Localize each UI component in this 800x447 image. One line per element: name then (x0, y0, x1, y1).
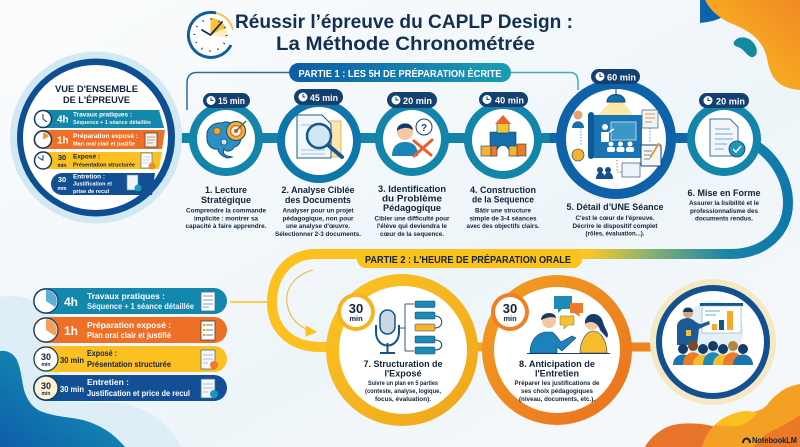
overview heading: DE L'ÉPREUVE (63, 94, 131, 106)
overview row: entretien (51, 173, 155, 195)
left list: préparation exposé: Préparation exposé : (87, 320, 171, 330)
overview row: entretien: Entretion : (73, 174, 105, 180)
title clock icon (188, 12, 233, 57)
icon: person, question and cross: ? (421, 123, 427, 134)
icon: person, question and cross (392, 119, 432, 156)
overview row: préparation exposé: 1h (57, 136, 69, 146)
step 8 text: l'Entretien (535, 368, 579, 380)
time badge 20 min: 20 min (403, 96, 432, 106)
step 1 circle with brain icon (186, 93, 267, 230)
left list: entretien: Entretien : (87, 377, 129, 387)
overview row: travaux pratiques: 4h (57, 114, 69, 126)
step 6 text: documents rendus. (695, 216, 753, 222)
step 6 text (688, 188, 760, 222)
decorative corner shapes: bottom left (0, 296, 181, 447)
step 4 text: de la Sequence (472, 194, 534, 206)
left list: travaux pratiques (33, 288, 227, 314)
badge 30 min: min (503, 314, 517, 323)
title: La Méthode Chronométrée (276, 33, 535, 55)
step 1 text: Stratégique (201, 195, 251, 206)
step 7 circle (326, 274, 478, 426)
step 2 text: une analyse d'œuvre. (286, 223, 350, 230)
badge 30 min: min (349, 314, 363, 323)
icon: two people talking (527, 296, 610, 354)
step 6 text: Assurer la lisibilité et le (689, 200, 759, 207)
left list: préparation exposé (33, 317, 227, 343)
overview row: travaux pratiques: Travaux pratiques : (73, 112, 132, 118)
step 5 text: (rôles, évaluation...). (586, 230, 645, 238)
time badge 45 min (294, 89, 343, 105)
step 4 text: avec des objectifs clairs. (466, 223, 540, 230)
step 3 text: du Problème (382, 194, 442, 204)
step 3 text: l'élève qui deviendra le (377, 223, 447, 230)
step 2 text: Sélectionner 2-3 documents. (275, 231, 361, 238)
badge 30 min (337, 293, 375, 331)
step 5 text: C'est le cœur de l'épreuve. (576, 215, 655, 222)
title (235, 11, 573, 55)
overview row: entretien: Justification et (73, 182, 112, 188)
overview row: préparation exposé: Man oral clair et justifie (73, 142, 135, 148)
step 7 text: focus, évaluation). (375, 396, 431, 403)
final circle with presenter (650, 279, 776, 405)
overview heading: VUE D'ENSEMBLE (55, 84, 139, 95)
step 1 text: Comprendre la commande (186, 208, 266, 214)
step 8 text: (niveau, documents, etc.). (519, 396, 595, 403)
step 2 text: des Documents (285, 195, 351, 206)
step 8 text: 8. Anticipation de (519, 359, 595, 370)
overview row: travaux pratiques: Séquence + 1 séance détaillée (73, 120, 151, 126)
step 7 text: 7. Structuration de (364, 359, 442, 370)
left list: préparation exposé: 1h (64, 324, 78, 338)
time badge 20 min (387, 92, 437, 108)
part 1 heading pill (289, 63, 511, 82)
step 8 circle (482, 275, 632, 425)
step 7 text: Suivre un plan en 5 parties (368, 380, 438, 387)
left list: exposé: 30 min (60, 356, 84, 365)
step 3 text: cœur de la sequence. (380, 231, 444, 238)
step 3 circle with person icon (374, 92, 450, 238)
overview row: préparation exposé (34, 130, 165, 149)
time badge 20 min: 20 min (716, 96, 745, 106)
left list: exposé: min (42, 362, 50, 368)
left list: exposé: 30 (41, 352, 51, 362)
part 2 heading pill: PARTIE 2 : L'HEURE DE PRÉPARATION ORALE (365, 253, 571, 266)
left list: préparation exposé: Plan oral clair et justifié (87, 331, 172, 340)
step 2 text: 2. Analyse Ciblée (282, 185, 354, 196)
overview heading (55, 84, 139, 106)
part 2 heading pill (357, 250, 582, 268)
left list: entretien: 30 min (60, 385, 84, 394)
step 4 text (466, 185, 540, 230)
title: Réussir l’épreuve du CAPLP Design : (235, 11, 573, 33)
step 4 text: 4. Construction (470, 185, 536, 196)
step 2 text: pédagogique, non pour (282, 216, 354, 222)
bracket lines for part 1 (187, 72, 578, 110)
overview row: exposé: 30 (58, 153, 66, 162)
step 4 text: simple de 3-4 séances (470, 216, 537, 222)
step 1 text: 1. Lecture (205, 185, 247, 196)
part 1 heading pill: PARTIE 1 : LES 5H DE PRÉPARATION ÉCRITE (298, 67, 502, 80)
time badge 45 min: 45 min (310, 93, 338, 103)
overview row: exposé: min (58, 163, 66, 169)
icon: brain and target (207, 121, 246, 158)
left list: exposé: Exposé : (87, 348, 117, 358)
step 8 text (514, 359, 600, 403)
step 3 text: Cibler une difficulté pour (374, 216, 450, 222)
icon: blueprint classroom (572, 88, 661, 179)
time badge 60 min: 60 min (607, 72, 636, 82)
overview row: entretien: prise de recul (73, 189, 109, 195)
step 5 text (566, 202, 664, 238)
step 2 text: Analyser pour un projet (282, 208, 354, 214)
decorative corner shapes: bottom right (645, 384, 800, 447)
step 3 text: Pédagogique (383, 203, 441, 214)
icon: document with check (710, 119, 745, 157)
left list: travaux pratiques: 4h (64, 295, 78, 309)
step 4 text: Bâtir une structure (475, 208, 531, 214)
left list: travaux pratiques: Séquence + 1 séance détaillée (87, 302, 195, 311)
overview row: préparation exposé: Préparation exposé : (73, 133, 138, 140)
step 6 text: 6. Mise en Forme (688, 188, 760, 199)
step 2 text (275, 185, 361, 238)
step 1 text: capacité à faire apprendre. (186, 223, 267, 230)
badge 30 min (491, 293, 529, 331)
step 5 text: Décrire le dispositif complet (572, 223, 658, 230)
overview row: travaux pratiques (34, 110, 164, 128)
left list: exposé (33, 346, 227, 372)
icon: castle of blocks (481, 115, 526, 156)
left list: exposé: Présentation structurée (87, 360, 172, 369)
step 3 text: 3. Identification (378, 184, 446, 195)
main route: blue connector band (170, 138, 788, 254)
overview row: entretien: 30 (58, 175, 66, 184)
left list: entretien: min (42, 391, 50, 397)
left list: entretien: Justification et price de recul (87, 389, 190, 398)
step 6 text: professionnalisme des (690, 208, 758, 215)
overview circle (10, 52, 182, 224)
step 4 circle with blocks icon (464, 92, 542, 230)
time badge 60 min (591, 69, 640, 84)
step 5 text: 5. Détail d’UNE Séance (566, 202, 664, 213)
overview row: exposé: Présentation structurée (73, 162, 135, 168)
step 1 text (186, 185, 267, 230)
step 7 text: l'Exposé (384, 368, 422, 380)
badge 30 min: 30 (503, 301, 517, 316)
icon: presenter and audience (673, 301, 753, 365)
icon: microphone and flowchart (376, 301, 442, 354)
step 3 text (374, 184, 450, 238)
badge 30 min: 30 (349, 301, 363, 316)
step 7 text (364, 359, 442, 403)
step 2 circle with magnifier icon (275, 89, 361, 238)
left list: entretien: 30 (41, 381, 51, 391)
left list: entretien (33, 375, 227, 401)
icon: documents and magnifier (297, 115, 342, 158)
overview row: entretien: mm (58, 186, 67, 192)
part 2 route: yellow loop (230, 254, 655, 347)
step 8 text: Préparer les justifications de (514, 380, 600, 387)
step 8 text: ses choix pédagogiques (521, 388, 593, 395)
step 5 circle with blueprint icon (556, 69, 676, 238)
overview row: exposé: Exposé : (73, 154, 100, 160)
left list: travaux pratiques: Travaux pratiques : (87, 291, 165, 301)
step 6 circle with document icon (687, 93, 761, 222)
time badge 40 min: 40 min (495, 96, 524, 106)
decorative corner shapes: top right (700, 0, 800, 90)
step 1 text: implicite : montrer sa (194, 216, 258, 222)
step 7 text: (conteste, analyse, logique, (365, 388, 441, 395)
overview row: exposé (34, 152, 162, 170)
time badge 15 min: 15 min (218, 96, 245, 106)
